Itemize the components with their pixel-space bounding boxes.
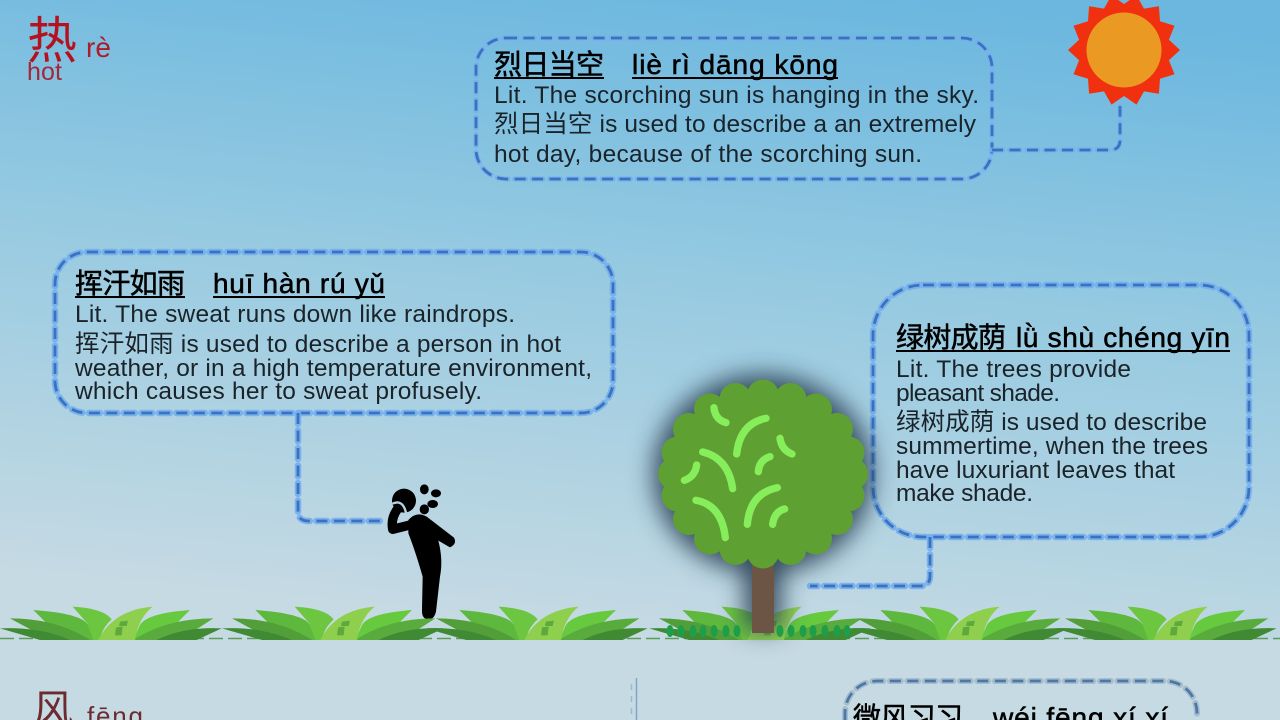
callout: sweat idiom: weather, or in a high temperature environment, <box>74 355 592 382</box>
heading: hot character: hot <box>27 58 62 86</box>
heading: wind character <box>33 688 143 720</box>
callout: scorching sun idiom: liè rì dāng kōng <box>632 49 838 80</box>
grass strip <box>0 607 1280 640</box>
arrow: tree connector <box>810 537 930 586</box>
callout: shade idiom: pleasant shade. <box>896 380 1060 407</box>
callout: scorching sun idiom <box>476 38 992 179</box>
panel divider <box>632 678 636 720</box>
callout: scorching sun idiom: Lit. The scorching sun is hanging in the sky. <box>494 82 979 109</box>
callout: sweat idiom <box>55 252 613 413</box>
icon: tree <box>653 374 873 637</box>
callout: scorching sun idiom: 烈日当空 is used to describe a an extremely <box>494 110 977 138</box>
callout: sweat idiom: huī hàn rú yǔ <box>213 268 385 299</box>
callout: breeze idiom <box>845 681 1197 720</box>
callout: sweat idiom: Lit. The sweat runs down like raindrops. <box>75 301 515 328</box>
tree leaf highlights <box>684 408 792 538</box>
tree trunk <box>752 555 774 633</box>
callout: sweat idiom: 挥汗如雨 is used to describe a person in hot <box>75 330 561 358</box>
tree canopy <box>658 380 868 568</box>
callout: shade idiom: 绿树成荫 is used to describe <box>896 408 1207 436</box>
callout: shade idiom: Lit. The trees provide <box>896 356 1131 383</box>
callout: shade idiom <box>873 285 1249 537</box>
icon: sweating person <box>392 484 455 619</box>
tree shadow <box>653 374 873 630</box>
icon: sun <box>1068 0 1180 105</box>
callout: scorching sun idiom: 烈日当空 <box>494 49 604 80</box>
callout: sweat idiom: 挥汗如雨 <box>75 268 185 299</box>
callout: shade idiom: 绿树成荫 <box>896 322 1006 353</box>
callout: shade idiom: make shade. <box>896 480 1033 507</box>
arrow: sun connector <box>992 106 1120 150</box>
callout: sweat idiom: which causes her to sweat profusely. <box>74 378 482 405</box>
callout: shade idiom: have luxuriant leaves that <box>896 457 1175 484</box>
heading: hot character <box>27 13 111 86</box>
arrow: sweat connector <box>298 413 385 521</box>
heading: hot character: 热 <box>27 13 77 69</box>
callout: shade idiom: lǜ shù chéng yīn <box>1016 322 1230 353</box>
callout: scorching sun idiom: hot day, because of the scorching sun. <box>494 141 922 168</box>
heading: hot character: rè <box>86 32 111 63</box>
callout: shade idiom: summertime, when the trees <box>896 433 1208 460</box>
tree base shrubs <box>666 625 850 637</box>
